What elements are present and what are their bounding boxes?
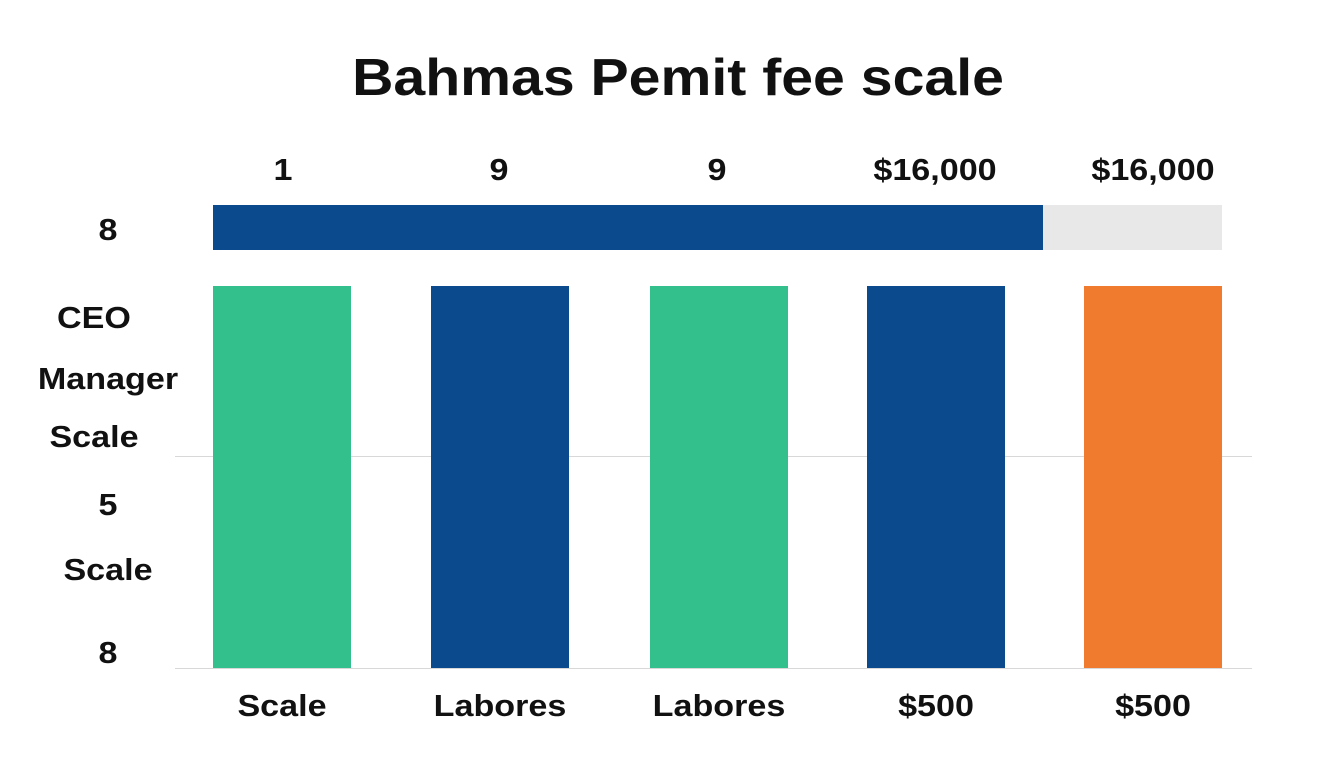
y-axis labels: Scale <box>63 552 153 587</box>
top value labels: 9 <box>490 152 508 187</box>
top value labels: 9 <box>708 152 726 187</box>
top value labels: $16,000 <box>1091 152 1215 187</box>
x-axis labels: Labores <box>434 688 566 723</box>
top value labels: $16,000 <box>873 152 997 187</box>
x-axis labels: Scale <box>237 688 327 723</box>
y-axis labels: 8 <box>99 635 117 670</box>
title: Bahmas Pemit fee scale <box>352 49 1004 107</box>
x-axis labels: $500 <box>898 688 974 723</box>
y-axis labels: Manager <box>38 361 178 396</box>
bar chart <box>213 286 1222 668</box>
progress bar <box>213 205 1222 250</box>
x-axis labels <box>237 688 1191 723</box>
y-axis labels: 5 <box>99 487 117 522</box>
top value labels <box>274 152 1215 187</box>
y-axis labels: Scale <box>49 419 139 454</box>
x-axis labels: Labores <box>653 688 785 723</box>
y-axis labels: 8 <box>99 212 117 247</box>
y-axis labels: CEO <box>57 300 131 335</box>
top value labels: 1 <box>274 152 292 187</box>
y-axis labels <box>38 212 178 670</box>
gridlines <box>175 456 1252 457</box>
x-axis labels: $500 <box>1115 688 1191 723</box>
